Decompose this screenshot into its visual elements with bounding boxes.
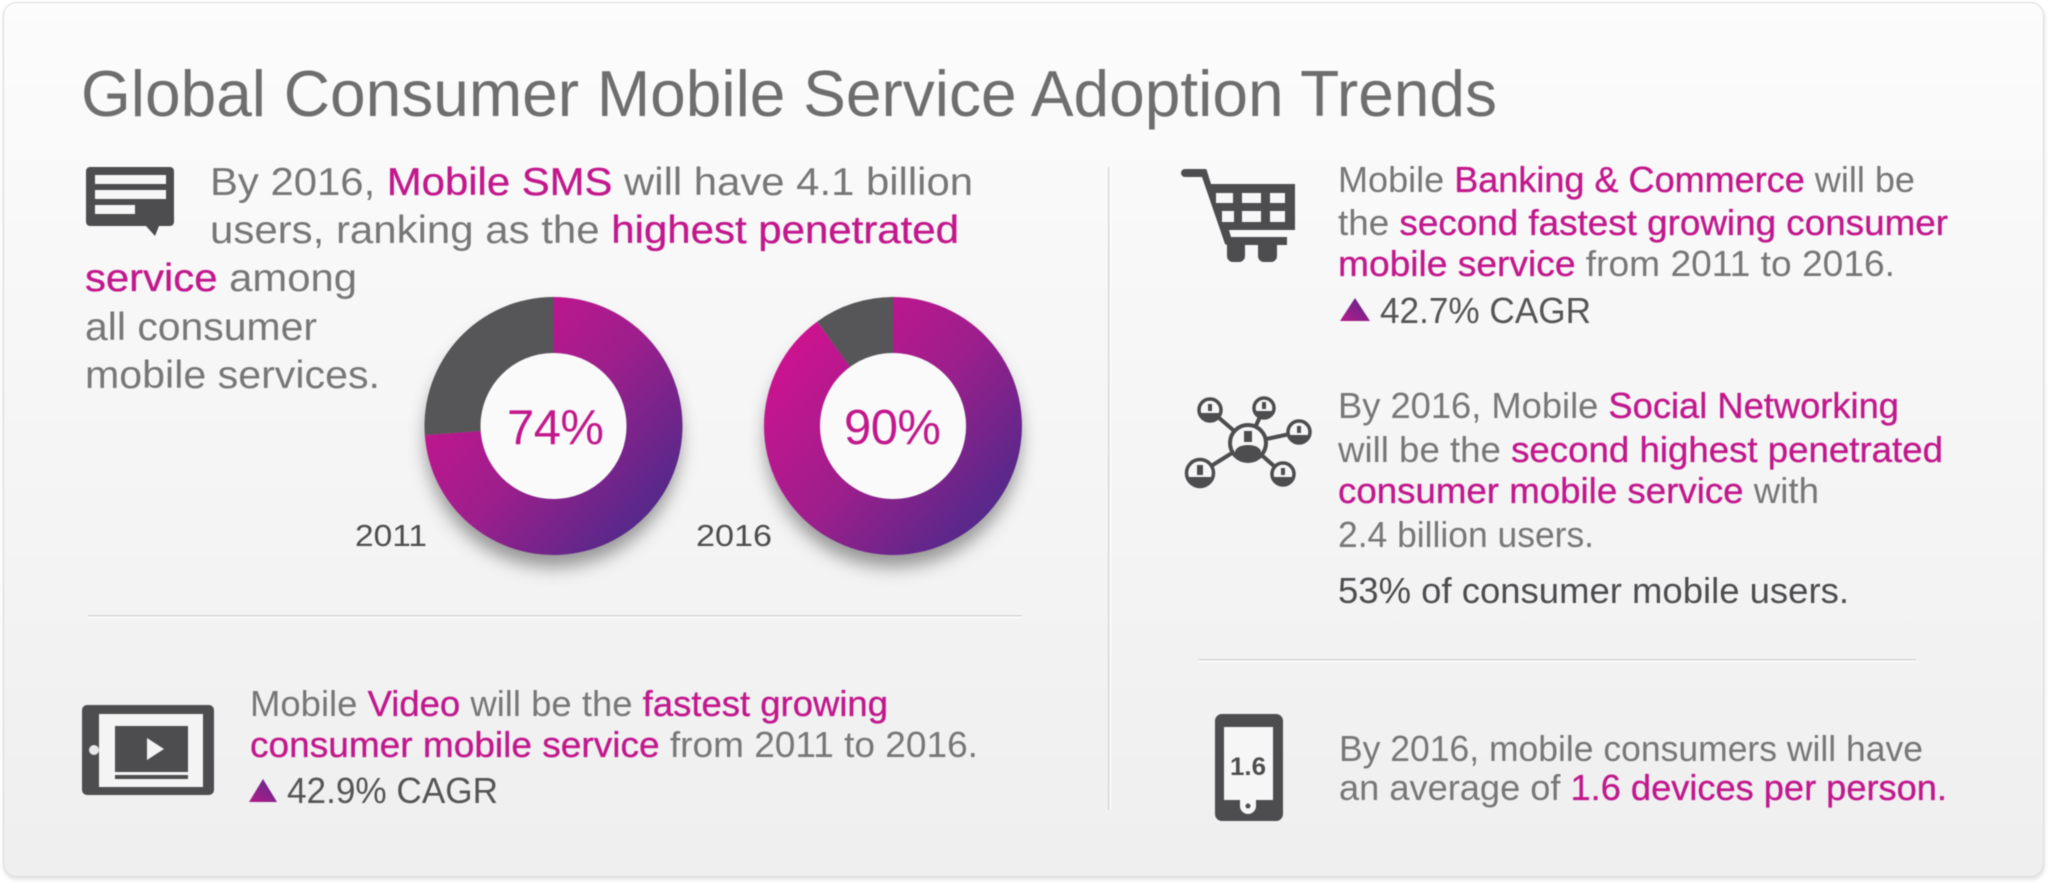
text: devices per person statement: an average of 1.6 devices per person. — [1339, 767, 1947, 808]
text: Mobile Video statement: consumer mobile service from 2011 to 2016. — [250, 724, 978, 765]
text: Mobile Social Networking statement: 2.4 billion users. — [1338, 514, 1594, 555]
text: Mobile Banking and Commerce statement: Mobile Banking & Commerce will be — [1338, 159, 1915, 200]
text: Mobile SMS statement: all consumer — [85, 306, 317, 349]
text: Mobile Social Networking statement: By 2016, Mobile Social Networking — [1338, 385, 1899, 426]
text: Mobile Video statement: Mobile Video will be the fastest growing — [250, 683, 888, 724]
icon: shopping cart — [1181, 169, 1295, 262]
icon: smartphone 1.6: 1.6 — [1230, 753, 1266, 781]
text: Mobile Banking and Commerce statement: the second fastest growing consumer — [1338, 202, 1948, 243]
CAGR 42.9%: 42.9% CAGR — [287, 770, 498, 811]
text: Mobile SMS statement: By 2016, Mobile SMS will have 4.1 billion — [210, 161, 973, 204]
text: Mobile Social Networking statement: consumer mobile service with — [1338, 470, 1819, 511]
text: Mobile Video statement — [250, 683, 978, 765]
label: 90%: 90% — [844, 401, 941, 455]
text: Mobile SMS statement: mobile services. — [85, 354, 380, 397]
text: Mobile Social Networking statement: will be the second highest penetrated — [1337, 429, 1943, 470]
text: Mobile Banking and Commerce statement — [1338, 159, 1948, 284]
donut chart: 2016 90% — [764, 297, 1022, 567]
text: 53% of consumer mobile users: 53% of consumer mobile users. — [1338, 570, 1849, 611]
icon: tablet with video — [82, 705, 214, 795]
text: Mobile Social Networking statement — [1337, 385, 1943, 555]
text: Mobile SMS statement: service among — [85, 257, 357, 300]
icon: smartphone 1.6 — [1215, 714, 1283, 821]
icon: SMS speech bubble — [86, 167, 174, 236]
label: 74%: 74% — [507, 401, 604, 455]
label: 2016: 2016 — [696, 518, 772, 553]
text: devices per person statement: By 2016, mobile consumers will have — [1339, 728, 1923, 769]
icon: social network — [1186, 398, 1310, 487]
text: Mobile SMS statement — [85, 161, 973, 397]
text: devices per person statement — [1339, 728, 1947, 808]
label: 2011: 2011 — [355, 518, 427, 553]
CAGR 42.7%: 42.7% CAGR — [1380, 290, 1591, 331]
text: Mobile SMS statement: users, ranking as the highest penetrated — [210, 209, 959, 252]
text: Mobile Banking and Commerce statement: mobile service from 2011 to 2016. — [1338, 243, 1895, 284]
donut chart: 2011 74% — [424, 297, 682, 567]
title: Global Consumer Mobile Service Adoption Trends — [81, 57, 1497, 130]
